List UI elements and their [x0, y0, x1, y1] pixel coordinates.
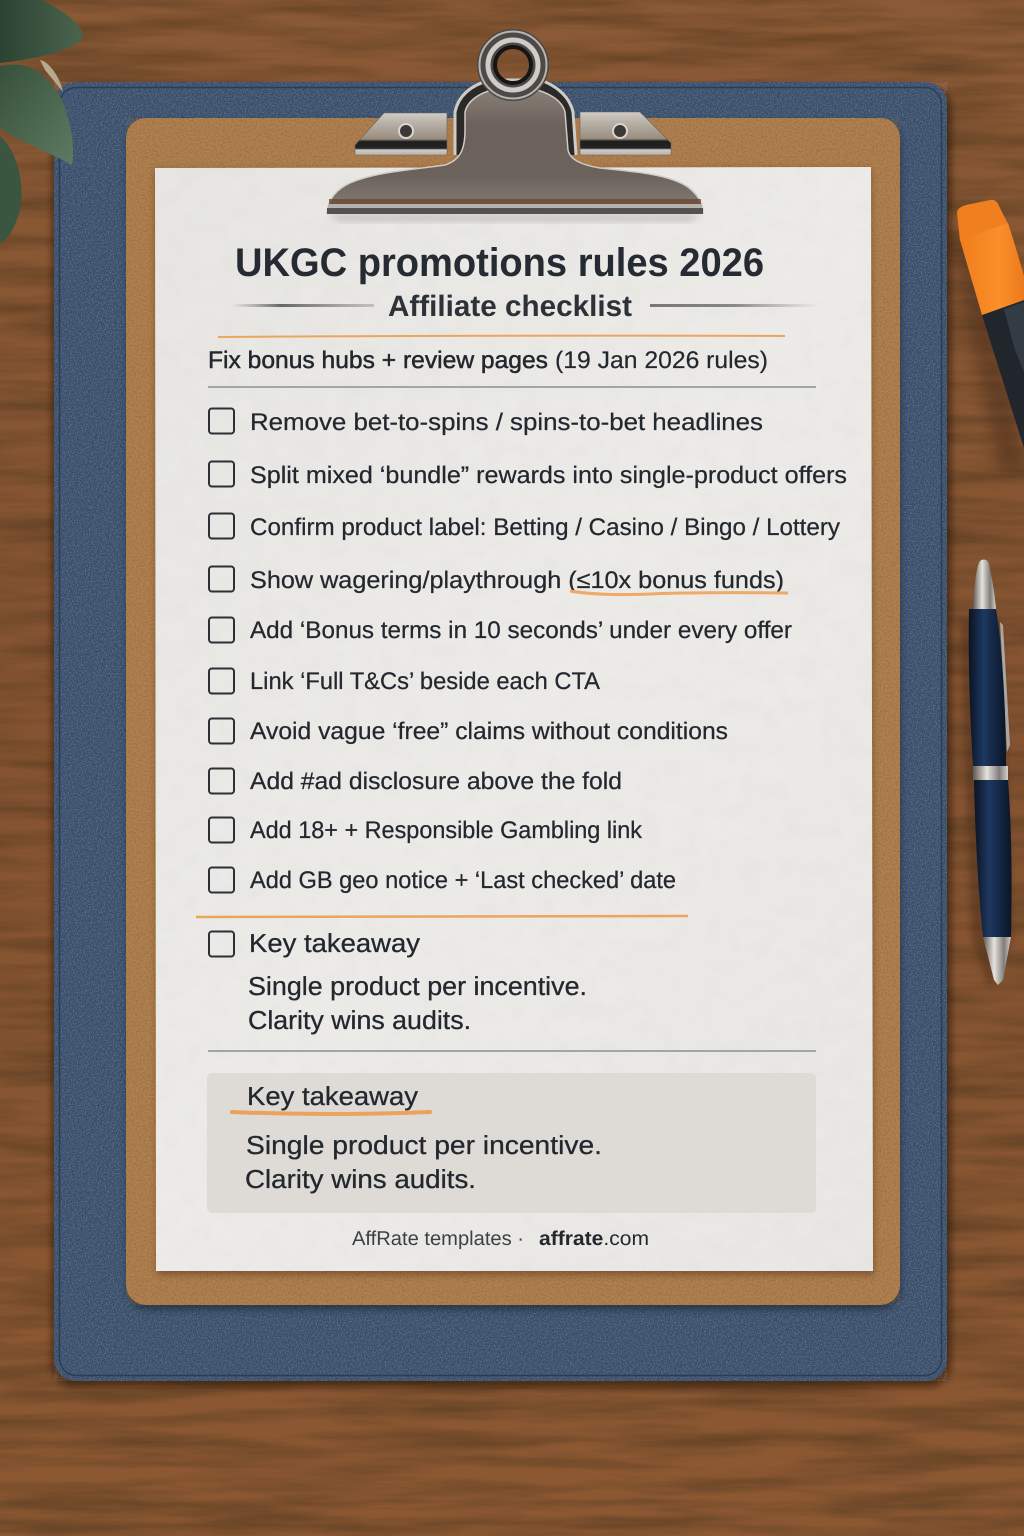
clip side tab: left [355, 113, 447, 155]
icon: ballpoint pen [960, 560, 1012, 990]
clip ring [480, 32, 546, 98]
footer: affrate.com [539, 1228, 649, 1250]
key takeaway checklist block: Single product per incentive. [248, 971, 587, 1001]
intro line: Fix bonus hubs + review pages [208, 347, 548, 374]
icon: highlighter pen [950, 200, 1024, 470]
icon: metal bulldog clip [327, 32, 703, 222]
item 2: Split mixed ‘bundle” rewards into single-product offers [250, 462, 847, 489]
paper sheet [155, 167, 874, 1275]
item 4: Show wagering/playthrough (≤10x bonus funds) [250, 567, 784, 594]
orange rule above takeaway [196, 916, 688, 917]
intro line: (19 Jan 2026 rules) [555, 347, 768, 374]
orange rule under heading [218, 336, 785, 337]
checklist [209, 408, 847, 894]
item 9: Add 18+ + Responsible Gambling link [250, 817, 643, 844]
clip side tab: right [580, 112, 671, 155]
title: UKGC promotions rules 2026 [235, 241, 764, 285]
panel: key takeaway callout: Single product per incentive. [246, 1130, 602, 1160]
footer [352, 1228, 649, 1250]
key takeaway checklist block: Clarity wins audits. [248, 1005, 471, 1035]
icon: plant leaves [0, 0, 83, 243]
intro line [208, 347, 768, 374]
subtitle with side rules: Affiliate checklist [388, 290, 632, 323]
key takeaway checklist block: Key takeaway [249, 928, 420, 958]
item 8: Add #ad disclosure above the fold [250, 768, 622, 795]
panel: key takeaway callout [207, 1073, 816, 1213]
subtitle with side rules [232, 290, 818, 323]
item 6: Link ‘Full T&Cs’ beside each CTA [250, 668, 600, 695]
clip wire strap [455, 80, 576, 155]
item 3: Confirm product label: Betting / Casino / Bingo / Lottery [250, 514, 840, 541]
panel: key takeaway callout: Clarity wins audits. [245, 1164, 476, 1194]
footer: AffRate templates · [352, 1228, 524, 1250]
item 10: Add GB geo notice + ‘Last checked’ date [250, 867, 676, 894]
clip body plate [327, 88, 703, 213]
key takeaway checklist block [209, 928, 587, 1035]
item 1: Remove bet-to-spins / spins-to-bet headlines [250, 409, 763, 436]
item 5: Add ‘Bonus terms in 10 seconds’ under every offer [250, 617, 792, 644]
blue felt backing board [52, 82, 951, 1387]
item 7: Avoid vague ‘free” claims without conditions [250, 718, 728, 745]
cork clipboard [126, 118, 901, 1310]
panel: key takeaway callout: Key takeaway [247, 1081, 418, 1111]
